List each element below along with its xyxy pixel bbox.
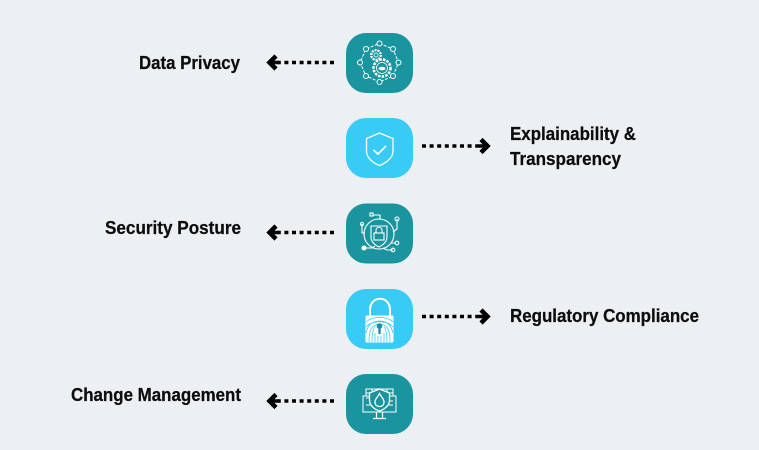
icon tile: monitor firewall shield [346, 374, 413, 434]
label: Data Privacy: Data Privacy [139, 53, 240, 73]
arrow: left to Data Privacy [270, 56, 334, 69]
label: Explainability & Transparency: Explainability & [510, 124, 636, 144]
arrow: left to Change Management [270, 394, 334, 408]
label: Regulatory Compliance: Regulatory Compliance [510, 306, 699, 326]
label: Change Management: Change Management [71, 385, 241, 405]
label: Security Posture: Security Posture [105, 218, 241, 238]
label: Explainability & Transparency [510, 124, 636, 169]
item: Security Posture [105, 204, 413, 264]
arrow: right to Regulatory Compliance [422, 310, 488, 323]
item: Change Management [71, 374, 413, 434]
label: Explainability & Transparency: Transparency [510, 149, 621, 169]
arrow: right to Explainability [422, 140, 488, 152]
icon tile: fingerprint padlock [346, 289, 413, 349]
item: Explainability & Transparency [346, 118, 636, 178]
item: Data Privacy [139, 33, 413, 93]
icon tile: circuit lock [346, 204, 413, 264]
icon tile: shield with check [346, 118, 413, 178]
arrow: left to Security Posture [270, 226, 334, 239]
item: Regulatory Compliance [346, 289, 699, 349]
icon tile: gears in network [346, 33, 413, 93]
